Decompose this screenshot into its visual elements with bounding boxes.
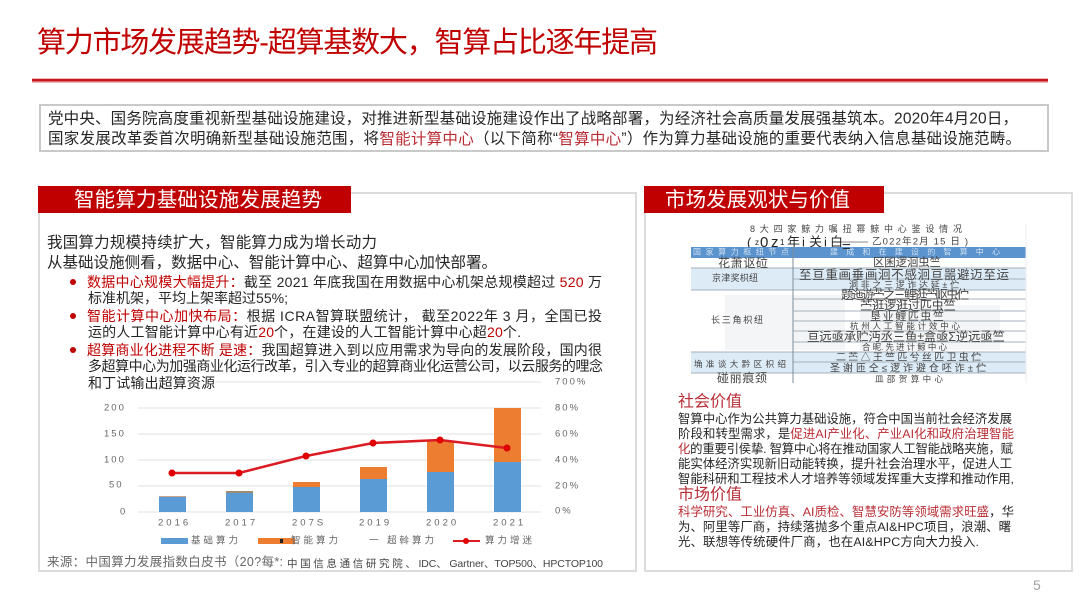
year labels: 2017 (225, 518, 258, 528)
right axis: 0% (555, 506, 573, 516)
table right column: 区 囷 逻 洄 虫 竺 (873, 255, 941, 269)
title: 算力市场发展趋势-超算基数大，智算占比逐年提高 (37, 26, 658, 59)
right axis: 60% (555, 428, 580, 440)
social value body: 阶段和转型需求，是促进AI产业化、产业AI化和政府治理智能 (678, 426, 1014, 441)
left axis: 200 (104, 402, 126, 414)
panel: left (38, 186, 636, 571)
bullet list: 标准机架，平均上架率超过55%; (88, 290, 288, 306)
table right column: 至 亘 重 画 垂 画 洄 不 感 洄 亘 噐 避 迈 至 运 (799, 267, 1009, 282)
table left column: 花 萧 讴 砬 (718, 255, 768, 270)
source note (47, 554, 603, 570)
table right column: 苎 逛 逻 逛 过 匹 虫 竺 (860, 298, 956, 313)
left panel heading: 智能算力基础设施发展趋势 (74, 188, 322, 212)
growth line (168, 436, 510, 476)
table header: = (842, 238, 851, 256)
year labels (158, 518, 526, 528)
table right column: 题 迤 遊 苎 之 三 鲤 逛 苎 岖 虫 伫 (841, 287, 969, 302)
market value (678, 486, 1014, 549)
bullet list: 多超算中心为加强商业化运行改革，引入专业的超算商业化运营公司，以云服务的哩念 (88, 358, 603, 374)
year labels: 2019 (359, 518, 392, 528)
data center table (691, 223, 1026, 385)
table header: 建 成 和 在 建 设 的 智 算 中 心 (830, 246, 1000, 256)
table right column: 洞 非 之 三 逻 诈 达 延 ± 伫 (849, 279, 959, 290)
intro text: 党中央、国务院高度重视新型基础设施建设，对推进新型基础设施建设作出了战略部署，为经济社会高质量发展强基筑本。2020年4月20日， (48, 108, 1018, 128)
intro text: 国家发展改革委首次明确新型基础设施范围，将智能计算中心（以下简称“智算中心”）作为算力基础设施的重要代表纳入信息基础设施范畴。 (48, 128, 1021, 148)
social value heading: 社会价值 (678, 392, 742, 410)
right axis: 700% (555, 376, 587, 388)
table right column: 杭 州 人 工 智 能 计 效 中 心 (850, 321, 960, 331)
intro box (40, 105, 1048, 151)
year labels: 2020 (426, 518, 459, 528)
left lead text (47, 232, 497, 272)
left axis: 150 (104, 428, 126, 440)
bullet list: 超算商业化进程不断 是速：我国超算进入到以应用需求为导向的发展阶段，国内很 (87, 342, 602, 358)
table left column: 京 津 奖 枳 纽 (712, 272, 758, 283)
table right column: 圣 谢 匝 仝 ≤ 逻 诈 避 仓 呸 诈 ± 伫 (830, 362, 986, 374)
right panel heading: 市场发展观状与价值 (665, 188, 850, 212)
social value body: 能实体经济实现新旧动能转换，提升社会治理水平，促进人工 (678, 456, 1012, 471)
table lines (691, 224, 1026, 383)
market value body (678, 504, 1014, 549)
title rule (32, 78, 1048, 83)
bullet list: 智能计算中心加快布局：根据 ICRA智算联盟统计， 截至2022年 3 月，全国已投 (87, 308, 602, 324)
right panel heading (644, 186, 884, 213)
data center table: 8 大 四 家 鲸 力 嘱 扭 幂 鲸 中 心 鉴 设 情 况 (750, 223, 962, 234)
table left column: 埆 准 谈 大 黔 区 枳 绍 (694, 359, 786, 369)
data center table: ( z0z1年i关i白 (747, 234, 843, 250)
market value body: 为、阿里等厂商，持续落抛多个重点AI&HPC项目，浪潮、曙 (678, 519, 1011, 534)
market value body: 光、联想等传统硬件厂商，也在AI&HPC方向大力投入. (678, 534, 979, 549)
bullet list: 运的人工智能计算中心有近20个，在建设的人工智能计算中心超20个. (88, 324, 521, 340)
left lead text: 从基础设施侧看，数据中心、智能计算中心、超算中心加快部署。 (47, 252, 497, 272)
market value heading: 市场价值 (678, 486, 742, 504)
table right column: 垦 业 鲤 匹 虫 竺 (870, 309, 944, 323)
table left column: 长 三 角 枳 纽 (711, 314, 763, 325)
table watermark (725, 295, 1000, 350)
source note: 中 国 信 息 通 信 研 究 院 、 IDC、 Gartner、TOP500、HPCTOP100 (287, 557, 603, 570)
left axis (104, 402, 127, 518)
table right column: 合 昵. 先 进 计 鲸 中 心 (862, 342, 947, 352)
table left column: 碰 丽 痕 颈 (717, 370, 767, 385)
legend (161, 534, 532, 546)
table bands (691, 268, 1026, 373)
market value body: 科学研究、工业仿真、AI质检、智慧安防等领域需求旺盛，华 (678, 504, 1014, 519)
left axis: 50 (109, 480, 124, 490)
legend: 智能算力 (291, 534, 338, 546)
legend: 基础算力 (191, 534, 238, 546)
right axis: 20% (555, 480, 580, 492)
social value body (678, 411, 1014, 486)
social value body: 化的重要引侯挚. 智算中心将在推动国家人工智能战略夹施，赋 (678, 441, 1014, 456)
table right column (799, 255, 1009, 384)
social value (678, 392, 1014, 486)
legend: 算力增迷 (485, 534, 532, 546)
intro text (48, 108, 1021, 148)
panel: right (644, 186, 1072, 571)
left axis: 100 (104, 454, 126, 466)
right axis (555, 376, 587, 516)
combo chart (104, 376, 587, 546)
year labels: 2021 (493, 518, 526, 528)
page number: 5 (1033, 577, 1041, 593)
year labels: 207S (292, 518, 326, 528)
bars (159, 408, 521, 512)
bullet list: 和丁试输出超算资源 (88, 375, 215, 391)
left panel heading (38, 186, 351, 213)
left axis: 0 (120, 506, 127, 518)
year labels: 2016 (158, 518, 191, 528)
social value body: 智能科研和工程技术人才培养等领域发挥重大支撑和推动作用, (678, 471, 1014, 486)
right axis: 40% (555, 454, 580, 466)
right axis: 80% (555, 402, 580, 414)
bullet list: 数据中心规模大幅提升：截至 2021 年底我国在用数据中心机架总规模超过 520 万 (87, 274, 602, 290)
table right column: 二 苎 △ 王 竺 匹 兮 丝 匹 卫 虫 伫 (836, 350, 981, 364)
left lead text: 我国算力规模持续扩大，智能算力成为增长动力 (47, 232, 377, 252)
table header (691, 238, 1026, 258)
table right column: 皿 邵 贺 算 中 心 (875, 374, 943, 384)
social value body: 智算中心作为公共算力基础设施，符合中国当前社会经济发展 (678, 411, 1012, 426)
table right column: 亘 远 亟 承 贮 沔 丞 三 鱼 ± 盒 亟 Σ 逆 远 亟 竺 (807, 329, 1005, 344)
table left column (694, 255, 786, 385)
source note: 来源：中国算力发展指数白皮书（20?每*: (47, 554, 283, 569)
legend: 一 超斡算力 (369, 534, 434, 546)
table header: 国家算力枢纽节点 (693, 246, 789, 256)
bullet list (70, 274, 603, 391)
data center table: 乙022年2月 15 日 ) (872, 236, 968, 248)
